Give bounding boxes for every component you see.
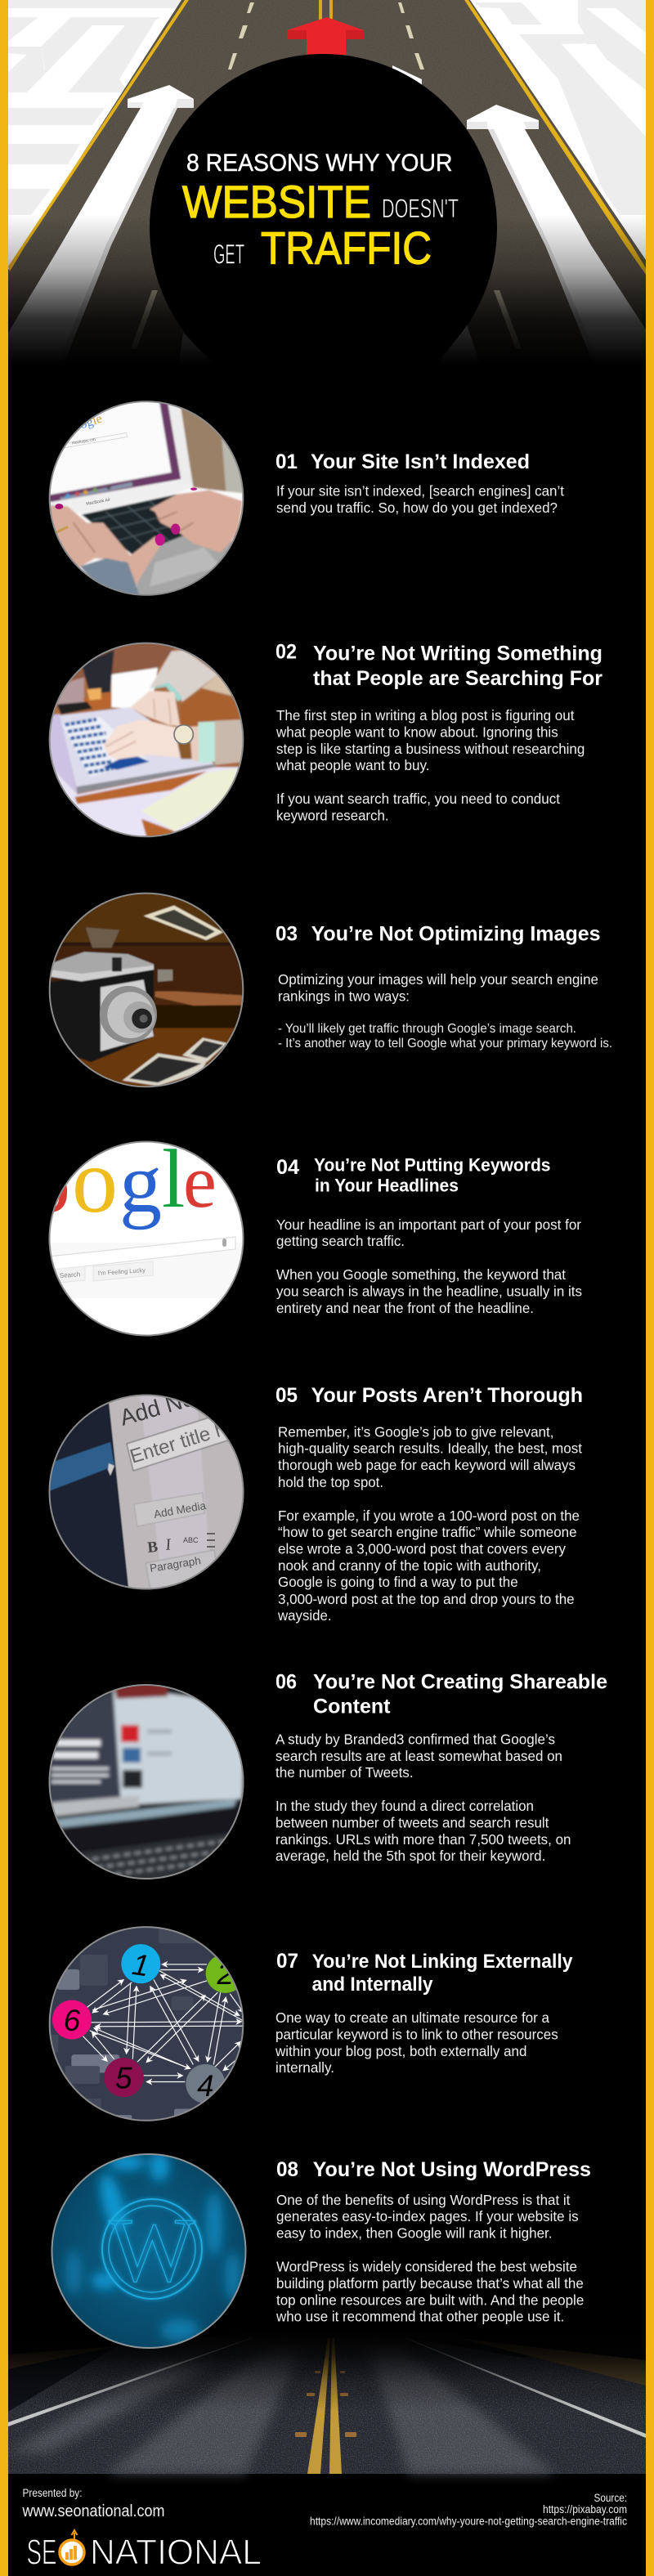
section 06 [45, 1671, 607, 1884]
photo: hands typing on laptop: mockups, cm [71, 437, 96, 446]
sources [310, 2492, 627, 2528]
body text: you search is always in the headline, usually in its [276, 1284, 582, 1300]
body text: Your headline is an important part of your post for [276, 1216, 581, 1233]
diagram: link network [49, 1926, 244, 2121]
centre double line [319, 0, 333, 20]
icon: red arrow [287, 17, 364, 55]
node 6: 6 [64, 2004, 81, 2037]
body text: WordPress is widely considered the best website [276, 2259, 577, 2275]
number and heading: 04 [276, 1156, 299, 1179]
number and heading [276, 1154, 551, 1195]
section 05 [45, 1380, 583, 1624]
node 5: 5 [115, 2061, 132, 2094]
number and heading: and Internally [312, 1973, 433, 1996]
node 1 [121, 1944, 160, 1983]
body text: rankings in two ways: [278, 988, 410, 1005]
icon: logo O with bars and arrow [60, 2530, 84, 2565]
node 2: 2 [216, 1957, 234, 1991]
icon: arrow behind circle [179, 65, 480, 364]
title text: 8 REASONS WHY YOUR [186, 150, 453, 177]
body text: between number of tweets and search result [275, 1815, 549, 1831]
photo: google homepage: o [72, 1131, 118, 1232]
body text [275, 1732, 571, 1864]
section 08 [49, 2150, 591, 2350]
body text: else wrote a 3,000-word post that covers every [278, 1540, 566, 1557]
body text: what people want to buy. [275, 757, 430, 773]
body text: One way to create an ultimate resource for a [275, 2009, 549, 2026]
body text: what people want to know about. Ignoring this [275, 724, 558, 740]
road edge lines [8, 0, 646, 275]
body text: hold the top spot. [278, 1474, 383, 1490]
logo: SEO National: SE [26, 2533, 57, 2572]
photo: wordpress editor: ABC [183, 1536, 199, 1544]
presented by [22, 2487, 165, 2520]
body text: 3,000-word post at the top and drop yours to the [278, 1591, 575, 1607]
section 03 [41, 884, 612, 1096]
body text: easy to index, then Google will rank it higher. [276, 2225, 553, 2242]
hero fade to black [8, 214, 646, 365]
icon: wordpress logo photo: W [109, 2200, 195, 2301]
body text: search results are at least somewhat based on [275, 1748, 562, 1764]
node 4 [186, 2064, 225, 2103]
body text: getting search traffic. [276, 1233, 405, 1249]
node 2 [206, 1957, 236, 1993]
body text: The first step in writing a blog post is figuring out [276, 707, 575, 724]
body text: “how to get search engine traffic” while someone [278, 1524, 577, 1540]
body text: send you traffic. So, how do you get indexed? [276, 500, 558, 516]
body text: If your site isn’t indexed, [search engines] can’t [276, 483, 564, 500]
photo: hands typing on laptop [41, 392, 253, 604]
body text: entirety and near the front of the headline. [276, 1300, 534, 1316]
body text [275, 707, 585, 823]
number and heading: 06 [275, 1671, 297, 1694]
body text: Remember, it’s Google’s job to give relevant, [278, 1423, 554, 1440]
section 02 [41, 634, 602, 846]
body text: One of the benefits of using WordPress is that it [276, 2192, 571, 2208]
body text [275, 2009, 558, 2076]
body text: - It’s another way to tell Google what your primary keyword is. [278, 1037, 612, 1051]
photo: wordpress editor: Add Media [153, 1499, 208, 1521]
number and heading: 03 [275, 923, 298, 946]
body text: high-quality search results. Ideally, the best, most [278, 1440, 582, 1457]
photo: wordpress editor: Paragraph [149, 1554, 202, 1575]
presented by: Presented by: [23, 2487, 82, 2499]
icon: white arrow right [467, 105, 646, 368]
body text: In the study they found a direct correlation [275, 1798, 534, 1814]
sources: https://pixabay.com [543, 2503, 627, 2516]
body text: average, held the 5th spot for their keyword. [275, 1848, 545, 1864]
road surface [8, 2330, 646, 2474]
number and heading: You’re Not Creating Shareable [313, 1671, 607, 1694]
title text: GET [213, 239, 244, 270]
section 01 [41, 392, 564, 604]
title text: WEBSITE [182, 176, 371, 227]
lane dashes [131, 2, 522, 349]
number and heading: in Your Headlines [315, 1175, 459, 1195]
number and heading: 02 [275, 641, 297, 664]
body text: thorough web page for each keyword will always [278, 1457, 576, 1473]
body text: For example, if you wrote a 100-word post on the [278, 1508, 580, 1524]
photo: hands typing on laptop: ogle [78, 412, 104, 432]
number and heading: You’re Not Writing Something [313, 643, 602, 665]
photo: laptop and watch [49, 643, 244, 837]
body text: step is like starting a business without researching [276, 741, 585, 757]
node 4: 4 [197, 2069, 214, 2103]
hero banner: road through a maze [0, 0, 646, 368]
title text [182, 150, 459, 273]
photo: wordpress editor: I [164, 1535, 172, 1554]
logo: SEO National: NATIONAL [90, 2533, 262, 2572]
number and heading: You’re Not Optimizing Images [311, 923, 601, 946]
photo: wordpress editor [49, 1395, 244, 1589]
photo: news site on laptop [45, 1680, 249, 1884]
number and heading: 08 [276, 2158, 298, 2181]
body text: internally. [275, 2059, 334, 2076]
icon: white arrow left [0, 85, 194, 364]
number and heading [276, 1950, 573, 1996]
body text: - You’ll likely get traffic through Google’s image search. [278, 1022, 576, 1036]
body text: within your blog post, both externally and [275, 2043, 526, 2059]
footer road image [8, 2330, 646, 2474]
section 07 [41, 1918, 573, 2130]
body text: rankings. URLs with more than 7,500 tweets, on [275, 1831, 571, 1848]
body text: Google is going to find a way to put the [278, 1574, 518, 1590]
number and heading: 01 [275, 450, 298, 473]
photo: vintage camera [49, 893, 244, 1087]
photo: google homepage: Search [60, 1270, 80, 1279]
lane lines [8, 2338, 646, 2438]
photo: google homepage: l [162, 1133, 185, 1225]
road reflectors [295, 2371, 356, 2437]
body text: keyword research. [276, 807, 389, 823]
body text: building platform partly because that’s what all the [276, 2275, 584, 2292]
number and heading: Content [313, 1695, 391, 1718]
title text: DOESN'T [382, 194, 459, 223]
body text [278, 971, 612, 1051]
fade at top of road [8, 2330, 646, 2412]
node 5 [104, 2058, 143, 2097]
logo: SEO National [26, 2530, 262, 2572]
photo: wordpress editor: B [146, 1539, 159, 1557]
centre yellow lines [307, 2338, 342, 2474]
photo: hands typing on laptop: MacBook Air [86, 498, 111, 507]
number and heading: You’re Not Linking Externally [312, 1951, 573, 1973]
node 1: 1 [130, 1947, 151, 1982]
number and heading [275, 1671, 607, 1718]
road surface [8, 0, 646, 368]
number and heading: You’re Not Putting Keywords [314, 1154, 551, 1175]
title circle [150, 54, 497, 401]
number and heading: 05 [275, 1384, 298, 1407]
maze left and right [8, 0, 646, 278]
body text: Optimizing your images will help your search engine [278, 971, 598, 988]
title text: TRAFFIC [261, 222, 432, 273]
number and heading: that People are Searching For [313, 667, 602, 690]
footer credits [22, 2487, 627, 2572]
body text: top online resources are built with. And the people [276, 2292, 584, 2308]
body text [275, 2192, 584, 2325]
body text: who use it recommend that other people use it. [275, 2309, 564, 2325]
icon: wordpress logo photo [49, 2150, 249, 2350]
number and heading: Your Posts Aren’t Thorough [311, 1384, 583, 1407]
sources: Source: [594, 2492, 627, 2504]
body text: A study by Branded3 confirmed that Google’s [275, 1732, 555, 1748]
body text [276, 483, 564, 516]
number and heading: Your Site Isn’t Indexed [311, 450, 530, 473]
photo: google homepage: e [183, 1140, 217, 1223]
body text: When you Google something, the keyword that [276, 1266, 566, 1283]
body text [277, 1423, 582, 1624]
body text: particular keyword is to link to other resources [275, 2026, 558, 2042]
body text: If you want search traffic, you need to conduct [276, 791, 560, 807]
photo: google homepage: g [119, 1136, 162, 1230]
body text [276, 1216, 582, 1316]
number and heading: You’re Not Using WordPress [313, 2158, 591, 2181]
body text: the number of Tweets. [275, 1764, 414, 1781]
roadside verges [8, 2330, 646, 2412]
node 6 [52, 2000, 92, 2039]
photo: google homepage: I'm Feeling Lucky [98, 1266, 146, 1277]
presented by: www.seonational.com [22, 2502, 165, 2520]
photo: google homepage: o [28, 1136, 70, 1230]
number and heading: 07 [276, 1950, 298, 1973]
section 04 [28, 1131, 582, 1337]
photo: wordpress editor: Add New [117, 1380, 214, 1431]
photo: wordpress editor: Enter title he [128, 1415, 240, 1468]
body text: nook and cranny of the topic with authority, [278, 1557, 541, 1574]
body text: generates easy-to-index pages. If your website is [276, 2208, 579, 2224]
photo: google homepage [28, 1131, 245, 1337]
body text: wayside. [277, 1607, 332, 1624]
number and heading [275, 641, 602, 690]
